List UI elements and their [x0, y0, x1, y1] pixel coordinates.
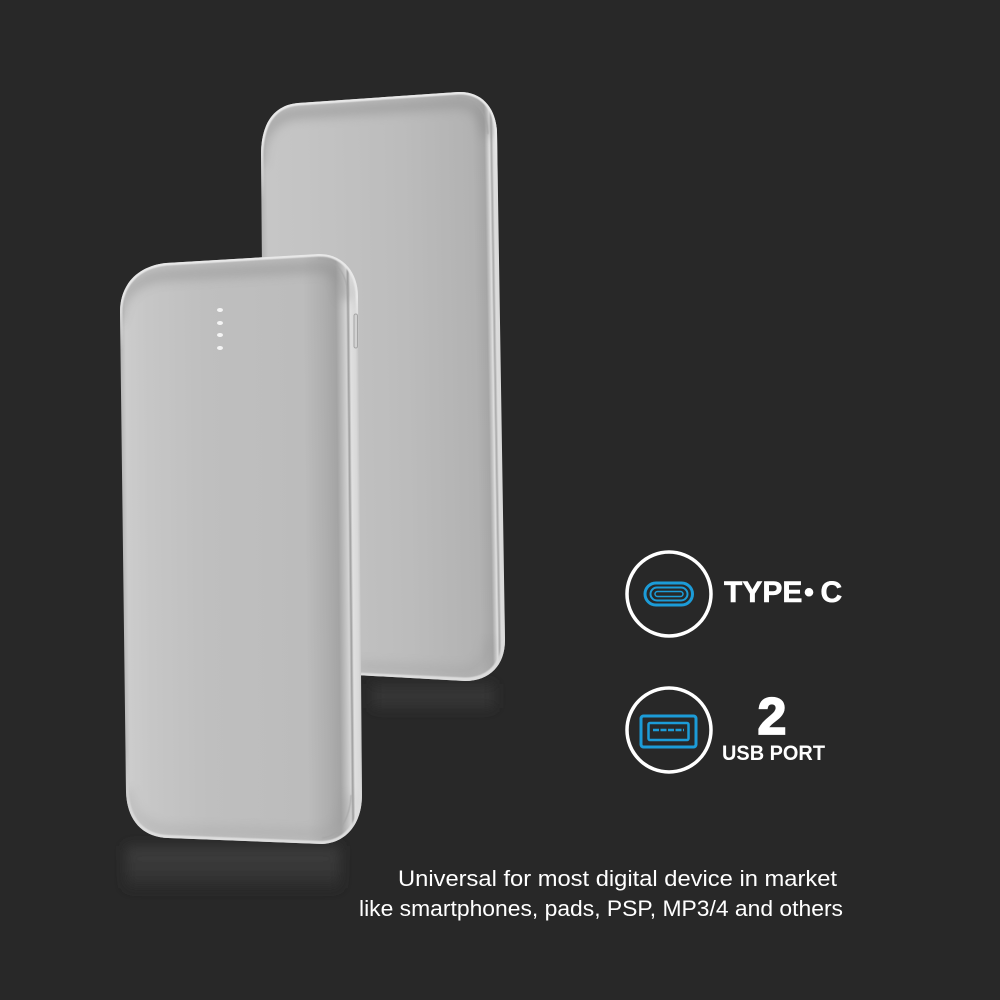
front device edge shading	[117, 254, 362, 844]
back power bank	[258, 92, 505, 681]
reflection: back power bank	[372, 684, 494, 708]
label: type-c: C	[820, 576, 842, 609]
infographic canvas	[120, 92, 842, 920]
icon: usb port	[627, 688, 711, 772]
number: 2: 2	[758, 688, 786, 746]
front device body	[120, 254, 362, 844]
label: usb port: USB PORT	[722, 742, 825, 765]
front device side button	[354, 314, 358, 348]
description text: Universal for most digital device in market	[398, 866, 837, 891]
front device LED indicators	[217, 308, 223, 350]
front power bank	[117, 254, 362, 844]
label: type-c: •	[804, 576, 814, 609]
back device body	[261, 92, 505, 681]
label: type-c: TYPE	[724, 576, 802, 609]
back device edge shading	[258, 92, 504, 680]
description text	[359, 866, 843, 921]
description text: like smartphones, pads, PSP, MP3/4 and others	[359, 896, 843, 921]
icon: type-c port	[627, 552, 711, 636]
reflection: front power bank	[126, 846, 340, 888]
